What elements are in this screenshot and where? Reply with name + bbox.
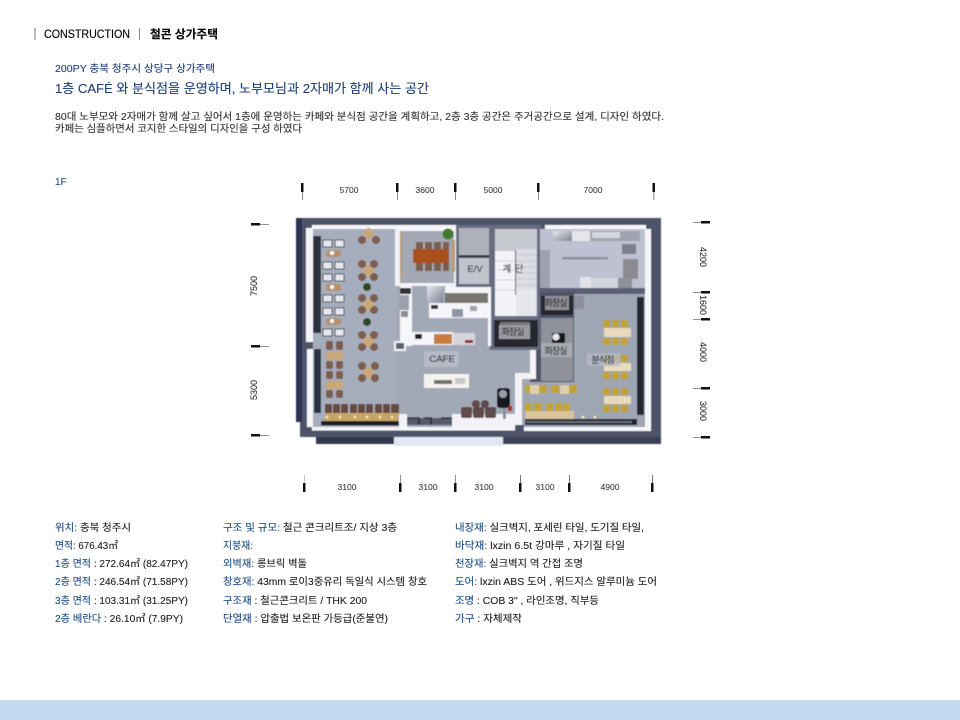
left seating columns <box>323 240 344 398</box>
building information: location and area: 2층 면적 : 246.54㎡ (71.58PY) <box>55 576 188 588</box>
private room with long table <box>395 228 457 286</box>
building information: finishes: 내장재: 실크벽지, 포세린 타일, 도기질 타일, <box>455 522 644 534</box>
building information: location and area: 3층 면적 : 103.31㎡ (31.25PY) <box>55 595 188 607</box>
bottom dimension line: 3100 <box>338 482 357 492</box>
building shell <box>296 218 661 446</box>
restrooms right <box>540 292 574 382</box>
restroom center <box>494 320 538 347</box>
page header: CONSTRUCTION <box>44 29 130 41</box>
building information: finishes: 조명 : COB 3" , 라인조명, 직부등 <box>455 595 599 607</box>
building information: location and area: 1층 면적 : 272.64㎡ (82.47PY) <box>55 558 188 570</box>
bottom dimension line: 3100 <box>536 482 555 492</box>
snack bar label: 분식점 <box>592 354 614 365</box>
building information: location and area: 면적: 676.43㎡ <box>55 540 118 552</box>
cafe label: CAFE <box>429 354 455 365</box>
top dimension line: 7000 <box>584 185 603 195</box>
cafe label <box>424 351 459 367</box>
building information: structure: 창호재: 43mm 로이3중유리 독일식 시스템 창호 <box>223 576 427 588</box>
bottom dimension line <box>303 475 654 492</box>
building information: location and area: 2층 베란다 : 26.10㎡ (7.9PY) <box>55 613 183 625</box>
page header: 철콘 상가주택 <box>150 27 218 41</box>
snack bar tables <box>525 320 637 425</box>
building information: finishes: 도어: lxzin ABS 도어 , 위드지스 알루미늄 도어 <box>455 575 657 588</box>
barrels <box>461 400 496 418</box>
building information: finishes: 가구 : 자체제작 <box>455 613 522 625</box>
building information: structure: 구조 및 규모: 철근 콘크리트조/ 지상 3층 <box>223 522 397 534</box>
right dimension line: 4000 <box>698 342 708 362</box>
top dimension line: 5700 <box>340 185 359 195</box>
stairs room: 계단 <box>502 263 524 275</box>
building information: finishes <box>455 522 657 625</box>
floor plan <box>296 218 661 446</box>
stove <box>497 388 512 419</box>
elevator shaft: E/V <box>467 264 483 275</box>
top dimension line: 3600 <box>416 185 435 195</box>
building information: structure: 외벽재: 롱브릭 벽돌 <box>223 558 307 570</box>
top dimension line <box>301 183 655 200</box>
restroom center: 화장실 <box>502 327 524 337</box>
bottom dimension line: 4900 <box>601 482 620 492</box>
cafe floor <box>313 229 536 427</box>
right dimension line: 1600 <box>698 295 708 315</box>
elevator shaft <box>456 225 496 287</box>
building information: structure <box>223 522 427 625</box>
kitchen area <box>540 229 645 294</box>
building information: finishes: 천장재: 실크벽지 역 간접 조명 <box>455 558 583 570</box>
building information: structure: 단열재 : 압출법 보온판 가등급(준불연) <box>223 612 388 625</box>
bottom dimension line: 3100 <box>419 482 438 492</box>
display counter <box>424 374 469 388</box>
description text <box>55 110 664 135</box>
restrooms right: 화장실 <box>544 346 568 356</box>
building information: location and area <box>55 521 188 625</box>
restrooms right: 화장실 <box>544 298 568 308</box>
snack bar label <box>587 353 620 366</box>
floor label: 1F <box>55 177 67 188</box>
right dimension line <box>693 221 710 438</box>
bottom bench <box>321 404 515 427</box>
snack bar floor <box>524 294 645 427</box>
page header <box>34 27 218 41</box>
left dimension line: 5300 <box>249 380 259 400</box>
left dimension line: 7500 <box>249 276 259 296</box>
project subtitle: 200PY 충북 청주시 상당구 상가주택 <box>55 63 215 75</box>
right dimension line: 3000 <box>698 401 708 421</box>
building information: finishes: 바닥재: lxzin 6.5t 강마루 , 자기질 타일 <box>455 540 625 552</box>
main heading: 1층 CAFÉ 와 분식점을 운영하며, 노부모님과 2자매가 함께 사는 공간 <box>55 81 429 96</box>
building information: structure: 지붕재: <box>223 540 253 552</box>
building information: structure: 구조재 : 철근콘크리트 / THK 200 <box>223 595 367 607</box>
top dimension line: 5000 <box>484 185 503 195</box>
bottom band <box>0 700 960 720</box>
description text: 카페는 심플하면서 코지한 스타일의 디자인을 구성 하였다 <box>55 122 302 135</box>
right dimension line: 4200 <box>698 247 708 267</box>
description text: 80대 노부모와 2자매가 함께 살고 싶어서 1층에 운영하는 카페와 분식점 공간을 계획하고, 2층 3층 공간은 주거공간으로 설계, 디자인 하였다. <box>55 110 664 123</box>
stairs room <box>491 225 541 350</box>
left dimension line <box>249 223 269 436</box>
building information: location and area: 위치: 충북 청주시 <box>55 521 131 534</box>
bottom dimension line: 3100 <box>475 482 494 492</box>
diamond tables <box>358 227 380 382</box>
kitchen bar counter <box>394 286 491 351</box>
